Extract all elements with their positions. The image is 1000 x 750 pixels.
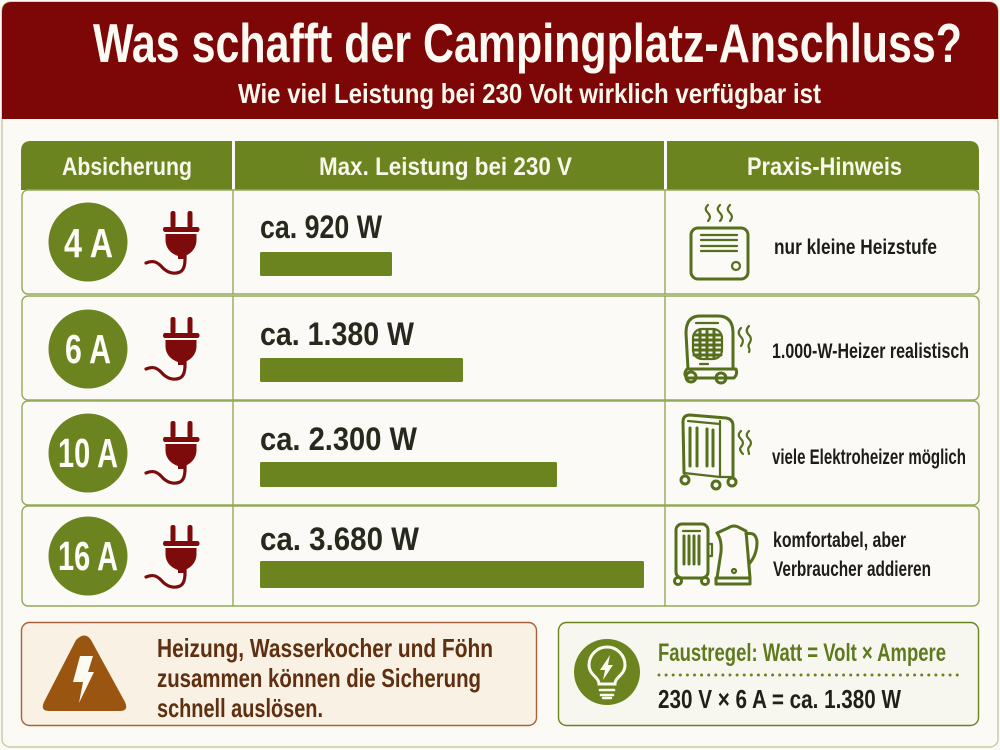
warning callout xyxy=(22,622,536,726)
column head: Praxis-Hinweis: Praxis-Hinweis xyxy=(747,153,902,181)
badge: 16 A: 16 A xyxy=(58,533,118,579)
icon: light bulb xyxy=(574,639,640,705)
badge: 4 A xyxy=(48,202,128,282)
icon: plug xyxy=(146,317,200,379)
hint text: komfortabel, aber xyxy=(773,528,906,552)
power bar xyxy=(260,358,463,382)
warning text xyxy=(157,633,493,723)
row: 6 A xyxy=(22,296,979,400)
power value: ca. 920 W xyxy=(260,209,383,245)
icon: plug xyxy=(146,421,200,483)
column head: Max. Leistung: Max. Leistung bei 230 V xyxy=(319,153,572,181)
badge: 4 A: 4 A xyxy=(64,220,113,266)
badge: 6 A: 6 A xyxy=(65,326,111,372)
hint text xyxy=(773,528,931,581)
column head: Absicherung xyxy=(21,141,232,190)
icon: warning triangle xyxy=(43,636,126,711)
column head: Praxis-Hinweis xyxy=(667,141,979,190)
icon: heater and kettle xyxy=(674,524,757,584)
power value: ca. 3.680 W xyxy=(260,521,420,557)
power value: ca. 2.300 W xyxy=(260,421,418,457)
rule of thumb callout xyxy=(558,622,978,726)
row: 10 A xyxy=(22,401,979,505)
column head: Absicherung: Absicherung xyxy=(62,153,192,181)
power bar xyxy=(260,462,557,487)
subtitle: Wie viel Leistung bei 230 Volt wirklich verfügbar ist xyxy=(238,78,821,109)
warning text: zusammen können die Sicherung xyxy=(157,663,481,693)
badge: 10 A: 10 A xyxy=(58,430,118,476)
badge: 10 A xyxy=(48,414,128,492)
row: 16 A xyxy=(22,506,979,606)
warning text: Heizung, Wasserkocher und Föhn xyxy=(157,633,493,663)
icon: small heater xyxy=(691,205,748,279)
icon: oil radiator xyxy=(681,415,751,489)
rule example: 230 V × 6 A = ca. 1.380 W xyxy=(658,684,901,714)
hint text: Verbraucher addieren xyxy=(773,557,931,581)
power bar xyxy=(260,252,392,276)
hint text: nur kleine Heizstufe xyxy=(774,235,937,259)
badge: 6 A xyxy=(48,310,128,388)
badge: 16 A xyxy=(48,516,128,596)
header banner xyxy=(2,2,998,119)
icon: plug xyxy=(146,211,200,273)
icon: plug xyxy=(146,525,200,587)
table header row xyxy=(21,141,979,190)
row: 4 A xyxy=(22,190,979,294)
icon: fan heater xyxy=(685,316,751,383)
power bar xyxy=(260,561,644,588)
power value: ca. 1.380 W xyxy=(260,316,415,352)
warning text: schnell auslösen. xyxy=(157,693,323,723)
column head: Max. Leistung xyxy=(235,141,664,190)
